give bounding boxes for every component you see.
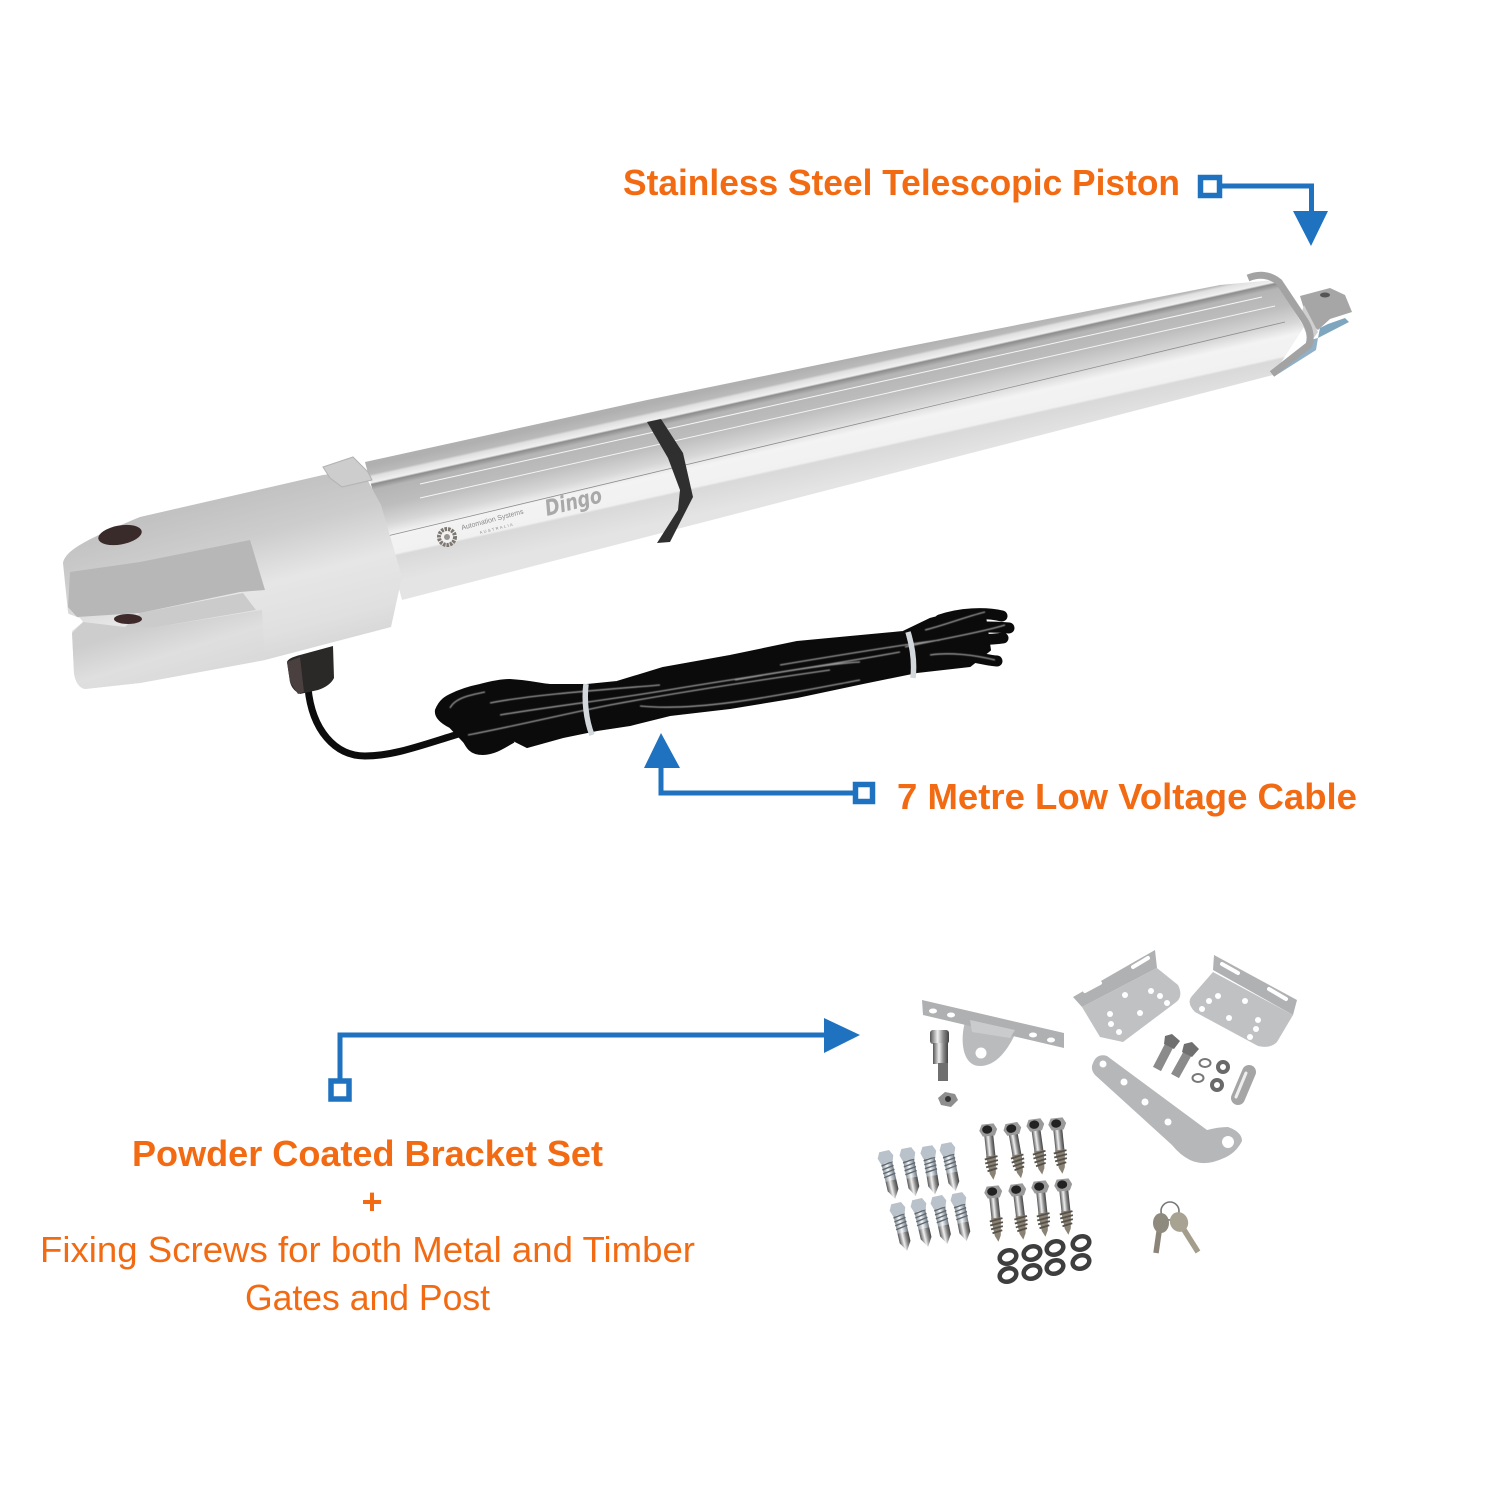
L bracket left: [1073, 950, 1180, 1042]
cable tie right: [908, 632, 914, 678]
pivot hole bottom: [114, 614, 142, 624]
arrow: cable callout: [644, 733, 872, 802]
lower fork face: [72, 610, 265, 689]
callout heading: 7 Metre Low Voltage Cable: 7 Metre Low Voltage Cable: [897, 776, 1357, 817]
bar bracket with tab: [922, 1000, 1064, 1066]
small bolts, washers, nuts and pin: [1157, 1034, 1249, 1098]
hardware kit illustration: [876, 950, 1297, 1284]
cable gland: [287, 646, 334, 694]
text block: bracket set: Powder Coated Bracket Set: [132, 1133, 603, 1174]
pivot hole top: [97, 522, 143, 548]
text block: bracket set: [40, 1133, 695, 1318]
brand mark: gear logo and name: AUSTRALIA: [479, 522, 514, 535]
text block: bracket set: +: [361, 1181, 383, 1222]
cable tie left: [585, 684, 592, 735]
cable from gland to coil: [308, 688, 462, 756]
clevis head casting: [63, 457, 402, 689]
rubber washers: [998, 1234, 1091, 1284]
end ring and clevis: [1248, 275, 1352, 376]
upper fork side: [68, 540, 265, 617]
fork slot: [125, 593, 256, 627]
brand mark: gear logo and name: [439, 508, 525, 545]
arrow: bracket set callout: [331, 1018, 860, 1099]
actuator product photo illustration: [63, 275, 1352, 756]
keys: [1153, 1202, 1198, 1253]
black band: [647, 419, 693, 543]
text block: bracket set: Fixing Screws for both Metal and Timber: [40, 1229, 695, 1270]
cable coil: [436, 612, 1009, 753]
brand mark: gear logo and name: Automation Systems: [461, 508, 525, 532]
offset arm bracket: [1092, 1055, 1242, 1163]
arrow: piston callout: [1200, 178, 1328, 246]
callout heading: Stainless Steel Telescopic Piston: Stainless Steel Telescopic Piston: [623, 162, 1180, 203]
fork notch: [66, 613, 83, 631]
aluminium tube: [365, 280, 1304, 600]
top tab: [323, 457, 372, 487]
Dingo logo text: Dingo: [542, 484, 605, 522]
text block: bracket set: Gates and Post: [245, 1277, 490, 1318]
shoulder bolt and nut: [930, 1030, 958, 1107]
machine bolts: [876, 1142, 974, 1253]
lag screws: [979, 1117, 1077, 1243]
L bracket right: [1190, 955, 1297, 1047]
